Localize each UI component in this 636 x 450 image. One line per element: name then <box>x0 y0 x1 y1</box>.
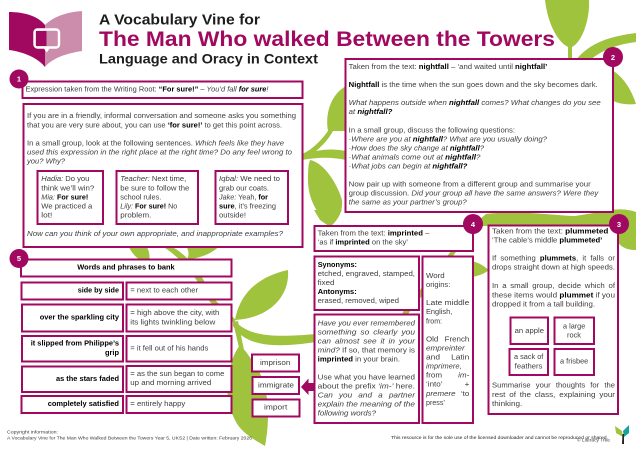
item: a large rock: rock <box>567 331 581 340</box>
panel 2: nightfall: group discussion. Did your group all have the same answers? Were they <box>349 188 600 197</box>
panel 3: plummeted: Taken from the text: plummeted <box>492 226 609 235</box>
example: Teacher and Lily: be sure to follow the <box>120 183 189 192</box>
panel 1: explanation: you? Why? <box>26 156 66 166</box>
panel 3: plummeted: If something plummets, it falls or <box>492 254 615 263</box>
panel 2: nightfall: ·Where are you at nightfall? What are you usually doing? <box>349 134 548 143</box>
memory and prefix prompt: explain the meaning of the <box>318 400 415 409</box>
memory and prefix prompt: Can you and a partner <box>318 391 415 400</box>
row: over the sparkling city <box>22 304 232 332</box>
word origins: from: <box>426 316 442 325</box>
panel 1: expression heading: 1 <box>17 74 21 84</box>
heading: words and phrases: Words and phrases to bank <box>77 263 175 272</box>
heading: imprinted: Taken from the text: imprinted – <box>318 229 430 238</box>
row: side by side: side by side <box>78 286 119 295</box>
memory and prefix prompt: imprinted in your brain. <box>318 354 400 363</box>
row: as the stars faded: up and morning arrived <box>130 378 211 387</box>
panel 3: plummeted: ‘The cable’s middle plummeted’ <box>492 236 602 245</box>
row: completely satisfied: = entirely happy <box>130 399 186 408</box>
panel 4: imprinted <box>314 214 483 423</box>
arrow to word cards <box>301 378 314 395</box>
row: completely satisfied <box>22 396 232 413</box>
item: an apple <box>510 318 548 344</box>
copyright footer: A Vocabulary Vine for The Man Who Walked Between the Towers Year 5, UKS2 | Date written: February 2026 <box>7 435 253 440</box>
panel 3: plummeted: thinking. <box>492 399 522 408</box>
memory and prefix prompt: Have you ever remembered <box>318 318 416 327</box>
row: side by side <box>22 282 232 300</box>
synonyms and antonyms: Antonyms: <box>318 287 357 296</box>
word origins: empreinter <box>426 343 465 352</box>
example: Teacher and Lily <box>116 171 198 224</box>
panel 2: nightfall: Nightfall is the time when the sun goes down and the sky becomes dark. <box>349 80 598 89</box>
licence footer: © Literacy Tree <box>577 437 611 443</box>
memory and prefix prompt: something so clearly you <box>318 327 416 336</box>
heading: imprinted: 4 <box>471 220 476 229</box>
panel 3: plummeted <box>488 214 629 414</box>
synonyms and antonyms: fixed <box>318 278 334 287</box>
panel 2: nightfall: ·What jobs can begin at nightfall? <box>349 161 468 170</box>
word origins <box>422 256 473 423</box>
background vine <box>128 0 636 446</box>
word card: imprison <box>252 354 299 372</box>
word origins: origins: <box>426 280 450 289</box>
item: an apple: an apple <box>515 326 544 335</box>
word origins: ‘into’ + <box>426 380 470 389</box>
panel 2: nightfall: the same as your partner’s group? <box>349 197 467 206</box>
synonyms and antonyms: erased, removed, wiped <box>318 296 399 305</box>
example: Teacher and Lily: problem. <box>120 211 151 220</box>
word origins: premere ‘to <box>425 389 469 398</box>
word card: immigrate: immigrate <box>258 381 294 390</box>
heading: words and phrases <box>10 249 232 276</box>
heading: imprinted <box>314 214 483 251</box>
word origins: and Latin <box>426 352 469 361</box>
panel 2: nightfall: Taken from the text: nightfall – ‘and waited until nightfall’ <box>349 62 547 71</box>
example: Iqbal and Jake: outside! <box>219 211 246 220</box>
synonyms and antonyms: etched, engraved, stamped, <box>318 269 415 278</box>
title: The Man Who walked Between the Towers <box>99 27 555 51</box>
row: side by side: = next to each other <box>130 286 198 295</box>
title: A Vocabulary Vine for <box>99 12 260 28</box>
licence footer: This resource is for the sole use of the licensed downloader and cannot be reproduced or shared. <box>391 435 608 440</box>
logo: Literacy Tree <box>615 425 629 444</box>
row: it slipped from Philippe's grip: grip <box>105 348 119 357</box>
panel 3: plummeted: rest of the class, explaining your <box>492 390 615 399</box>
panel 3: plummeted: drops straight down at high speeds. <box>492 263 615 272</box>
memory and prefix prompt: mind? If so, that memory is <box>318 345 415 354</box>
row: as the stars faded: as the stars faded <box>56 374 119 383</box>
word card: import: import <box>264 403 288 412</box>
word origins: Word <box>426 271 445 280</box>
row: over the sparkling city: over the sparkling city <box>40 313 120 322</box>
panel 1: explanation: If you are in a friendly, informal conversation and someone asks you something <box>27 111 296 120</box>
panel 1: explanation: that you are very sure about, you can use ‘for sure!’ to get this point across. <box>27 120 282 129</box>
panel 2: nightfall <box>346 47 623 212</box>
example: Iqbal and Jake: Jake: Yeah, for <box>218 192 268 201</box>
row: completely satisfied: completely satisfied <box>48 399 119 408</box>
panel 3: plummeted: Summarise your thoughts for the <box>492 381 615 390</box>
memory and prefix prompt: can almost see it in your <box>318 336 416 345</box>
memory and prefix prompt: Use what you have learned <box>318 373 415 382</box>
word origins: from im- <box>426 371 470 380</box>
panel 5: words and phrases to bank <box>10 249 232 413</box>
copyright footer: Copyright information: <box>7 429 58 434</box>
example: Teacher and Lily: Teacher: Next time, <box>120 174 186 183</box>
row: it slipped from Philippe's grip <box>22 336 232 362</box>
panel 2: nightfall: at nightfall? <box>349 107 393 116</box>
example: Teacher and Lily: Lily: For sure! No <box>120 202 177 210</box>
example: Iqbal and Jake <box>216 171 288 224</box>
panel 3: plummeted: dropped it from a tall building. <box>492 299 595 308</box>
word origins: English, <box>426 307 452 316</box>
example: Hadia and Mia: lot! <box>41 211 52 220</box>
example: Iqbal and Jake: grab our coats. <box>219 183 269 192</box>
example: Hadia and Mia <box>38 171 103 224</box>
word card: imprison: imprison <box>260 358 290 367</box>
licence footer <box>391 435 611 443</box>
example: Hadia and Mia: think we’ll win? <box>41 183 94 192</box>
word origins: press’ <box>426 398 445 407</box>
example: Teacher and Lily: school rules. <box>120 192 161 201</box>
row: as the stars faded <box>22 366 232 392</box>
word card: import <box>252 400 300 416</box>
panel 2: nightfall: What happens outside when nightfall comes? What changes do you see <box>349 98 601 107</box>
row: over the sparkling city: its lights twinkling below <box>130 317 216 326</box>
memory and prefix prompt: following words? <box>318 409 377 418</box>
panel 1: explanation: used this expression in the right place at the right time? Do any feel wrong to <box>27 147 292 156</box>
word origins: Old French <box>426 334 469 343</box>
title <box>99 12 555 66</box>
item: a large rock: a large <box>563 322 585 331</box>
example: Hadia and Mia: Hadia: Do you <box>41 174 89 183</box>
row: it slipped from Philippe's grip: it slipped from Philippe’s <box>31 339 119 348</box>
panel 2: nightfall: ·What animals come out at nightfall? <box>349 152 481 161</box>
item: a sack of feathers: a sack of <box>514 352 544 361</box>
item: a sack of feathers <box>510 349 548 375</box>
item: a large rock <box>554 318 594 344</box>
panel 2: nightfall: ·How does the sky change at nightfall? <box>349 143 485 152</box>
word origins: Late middle <box>426 298 469 307</box>
panel 1: expression heading: Expression taken from the Writing Root: “For sure!” – You’d fall for sure! <box>26 84 269 94</box>
panel 3: plummeted: these items would plummet if you <box>492 290 615 299</box>
item: a frisbee: a frisbee <box>560 356 588 365</box>
copyright footer <box>7 429 253 440</box>
panel 2: nightfall: 2 <box>611 53 615 62</box>
logo: open book with speech bubble <box>9 11 82 67</box>
memory and prefix prompt <box>314 314 419 423</box>
heading: imprinted: ‘as if imprinted on the sky’ <box>318 238 408 247</box>
row: over the sparkling city: = high above the city, with <box>130 308 219 317</box>
word card: immigrate <box>252 377 299 394</box>
memory and prefix prompt: about the prefix ‘im-’ here. <box>318 382 415 391</box>
panel 1: explanation <box>24 104 302 247</box>
panel 3: plummeted: 3 <box>617 220 621 229</box>
panel 2: nightfall: Now pair up with someone from a different group and summarise your <box>349 179 591 188</box>
item: a frisbee <box>554 349 594 375</box>
example: Iqbal and Jake: Iqbal: We need to <box>219 174 280 183</box>
synonyms and antonyms <box>314 256 419 310</box>
panel 1: explanation: Now can you think of your own appropriate, and inappropriate examples? <box>27 229 284 238</box>
panel 1: explanation: In a small group, look at the following sentences. Which feels like they have <box>27 138 284 147</box>
panel 3: plummeted: In a small group, decide which of <box>492 281 616 290</box>
example: Iqbal and Jake: sure, it’s freezing <box>219 202 276 210</box>
panel 2: nightfall: In a small group, discuss the following questions: <box>349 125 515 134</box>
example: Hadia and Mia: We practiced a <box>41 202 93 210</box>
item: a sack of feathers: feathers <box>515 361 543 370</box>
synonyms and antonyms: Synonyms: <box>318 260 357 269</box>
title: Language and Oracy in Context <box>99 52 319 66</box>
word origins: imprimere, <box>426 362 462 371</box>
row: it slipped from Philippe's grip: = it fell out of his hands <box>130 344 208 353</box>
row: as the stars faded: = as the sun began to come <box>130 369 224 378</box>
panel 1: expression heading <box>10 70 302 98</box>
example: Hadia and Mia: Mia: For sure! <box>41 192 88 201</box>
heading: words and phrases: 5 <box>17 254 21 263</box>
